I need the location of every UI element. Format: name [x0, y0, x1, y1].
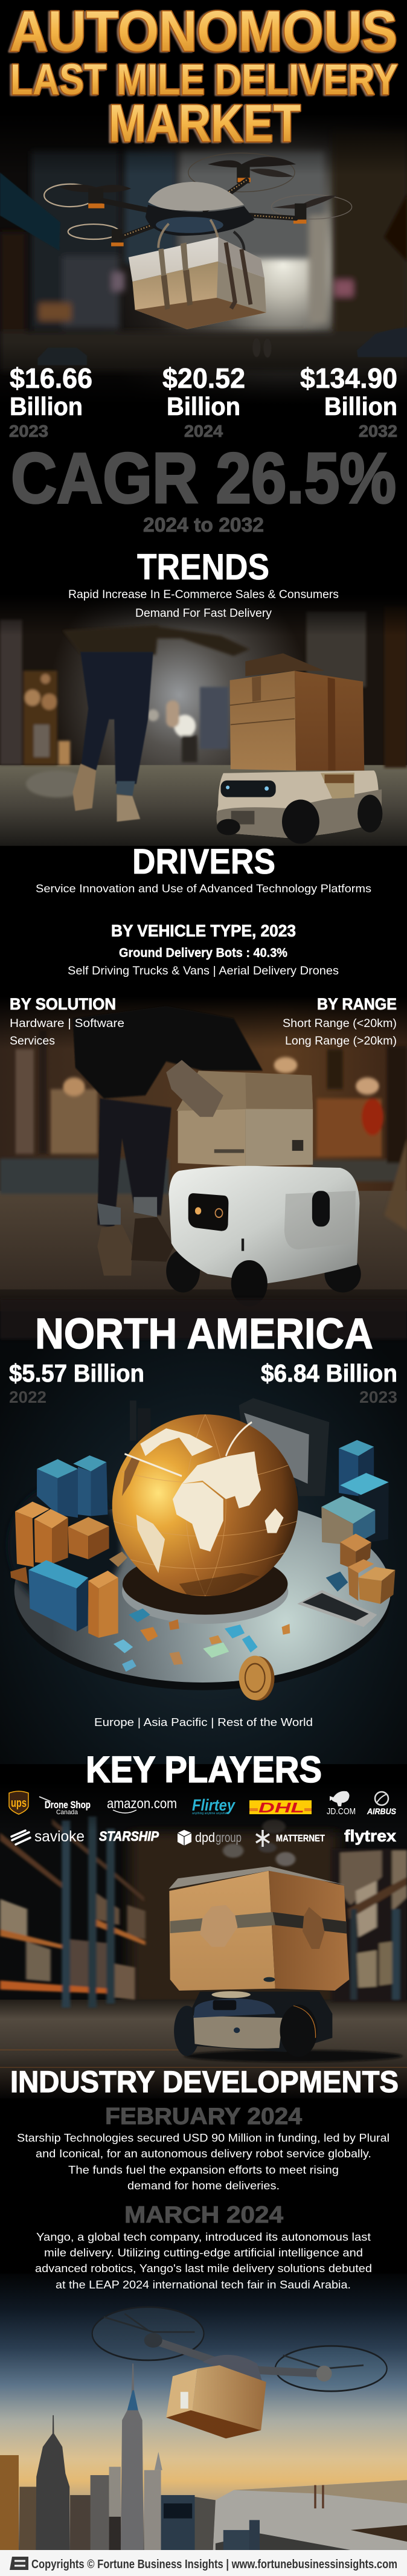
stat: 2024 market size: $20.52	[162, 362, 245, 394]
logos: key players row one	[9, 1791, 397, 1817]
panel: trends scene	[0, 601, 407, 846]
stat: 2023 market size: 2023	[9, 422, 48, 440]
stat: 2024 market size: Billion	[167, 392, 240, 420]
heading: drivers: DRIVERS	[132, 842, 275, 881]
stat: 2032 market size: 2032	[359, 422, 397, 440]
development: march 2024: MARCH 2024	[124, 2202, 283, 2228]
band: drivers black background	[0, 878, 407, 999]
text: trends description: Demand For Fast Delivery	[135, 607, 272, 620]
footer: copyright bar	[0, 2550, 407, 2576]
logo: dhl: DHL	[258, 1800, 304, 1815]
stat: 2024 market size: 2024	[184, 422, 223, 440]
panel: drivers scene	[0, 997, 407, 1330]
segment: by vehicle type	[68, 921, 339, 977]
development: march 2024	[35, 2202, 372, 2291]
icon: laptop	[297, 1590, 377, 1627]
stat: north america 2022: $5.57 Billion	[9, 1359, 144, 1387]
icon: stacked cardboard boxes	[230, 653, 364, 770]
logo: jd.com: JD.COM	[327, 1806, 356, 1817]
stat: 2023 market size: $16.66	[10, 362, 92, 394]
text: trends description: Rapid Increase In E-Commerce Sales & Consumers	[68, 588, 339, 601]
segment: by range	[283, 995, 397, 1048]
icon: delivery robot	[216, 770, 382, 844]
logo: dpd group	[178, 1830, 242, 1846]
panel: skyline drone scene	[0, 2274, 407, 2550]
segment: by solution: BY SOLUTION	[10, 995, 116, 1013]
development: march 2024: advanced robotics, Yango's last mile delivery solutions debuted	[35, 2262, 372, 2275]
logo: savioke	[11, 1828, 85, 1845]
stat: 2024 market size	[162, 362, 245, 440]
panel: warehouse robot scene	[0, 1815, 407, 2096]
icon: globe	[112, 1414, 298, 1596]
icon: large parcel	[169, 1866, 349, 1991]
icon: delivery drone	[44, 153, 352, 251]
logo: airbus: AIRBUS	[367, 1806, 397, 1816]
stat: 2023 market size: Billion	[10, 392, 83, 420]
development: march 2024: mile delivery. Utilizing cutting-edge artificial intelligence and	[44, 2247, 363, 2259]
icon: coin	[239, 1656, 275, 1701]
segment: by vehicle type: Self Driving Trucks & Vans | Aerial Delivery Drones	[68, 965, 339, 977]
stat: 2032 market size: Billion	[324, 392, 397, 420]
development: february 2024: demand for home deliveries.	[127, 2180, 280, 2192]
icon: blue and orange crates right	[321, 1440, 395, 1604]
band: developments text background	[0, 2100, 407, 2273]
icon: fortune business insights logo	[10, 2557, 28, 2570]
title: MARKET	[109, 94, 301, 153]
logo: airbus	[367, 1792, 397, 1816]
segment: by vehicle type: BY VEHICLE TYPE, 2023	[111, 921, 296, 940]
logo: savioke: savioke	[34, 1828, 85, 1845]
logo: flytrex: flytrex	[344, 1827, 396, 1845]
heading: north america: NORTH AMERICA	[35, 1310, 373, 1358]
development: february 2024: Starship Technologies secured USD 90 Million in funding, led by Plural	[17, 2132, 389, 2144]
development: february 2024: The funds fuel the expansion efforts to meet rising	[68, 2164, 339, 2176]
logo: ups	[9, 1791, 28, 1814]
stat: north america 2022: 2022	[9, 1388, 46, 1406]
logo: starship: STARSHIP	[99, 1829, 159, 1844]
logo: drone shop canada: Drone Shop	[45, 1799, 91, 1811]
stat: 2023 market size	[9, 362, 92, 440]
heading: key players: KEY PLAYERS	[86, 1749, 322, 1790]
text: other regions: Europe | Asia Pacific | Rest of the World	[94, 1716, 313, 1728]
icon: blue and orange crates left	[10, 1455, 118, 1638]
logo: dhl	[249, 1800, 312, 1815]
heading: trends: TRENDS	[137, 547, 269, 587]
development: february 2024: FEBRUARY 2024	[105, 2104, 302, 2130]
icon: round platform	[8, 1484, 391, 1690]
logo: ups: ups	[11, 1797, 27, 1810]
icon: river and far bank	[194, 2480, 407, 2550]
logo: dpd group: group	[216, 1830, 242, 1845]
development: february 2024	[17, 2104, 389, 2192]
logo: matternet: MATTERNET	[276, 1834, 325, 1844]
segment: by vehicle type: Ground Delivery Bots : 40.3%	[119, 946, 287, 960]
segment: by solution	[10, 995, 124, 1048]
icon: walking person	[62, 625, 249, 822]
icon: scattered small parcels	[109, 1551, 290, 1672]
segment: by range: Short Range (<20km)	[283, 1017, 397, 1030]
segment: by range: BY RANGE	[317, 995, 397, 1013]
logo: drone shop canada: Canada	[56, 1809, 79, 1816]
stat: north america 2023: $6.84 Billion	[261, 1359, 397, 1387]
development: march 2024: Yango, a global tech company, introduced its autonomous last	[36, 2231, 371, 2243]
icon: parcel under drone	[129, 237, 266, 329]
icon: street silhouettes	[37, 327, 407, 365]
logo: jd.com	[327, 1791, 356, 1817]
panel: north america region scene	[0, 1299, 407, 1764]
segment: by solution: Hardware | Software	[10, 1017, 124, 1030]
stat: north america 2022	[9, 1359, 144, 1406]
stat: 2032 market size: $134.90	[300, 362, 397, 394]
segment: by solution: Services	[10, 1035, 55, 1048]
icon: courier person	[72, 1006, 263, 1275]
icon: robot base	[174, 1991, 332, 2057]
logo: flirtey: Flirtey	[192, 1796, 236, 1814]
logo: flirtey: anything anytime anywhere	[192, 1812, 229, 1815]
development: february 2024: and Iconical, for an autonomous delivery robot service globally.	[36, 2148, 371, 2160]
title	[10, 0, 398, 153]
text: drivers description: Service Innovation and Use of Advanced Technology Platforms	[36, 883, 371, 895]
stat: 2032 market size	[300, 362, 397, 440]
icon: white delivery robot	[166, 1166, 361, 1306]
logo: dpd group: dpd	[195, 1830, 215, 1845]
logo: amazon: amazon.com	[107, 1795, 177, 1811]
stat: north america 2023: 2023	[359, 1388, 397, 1406]
stat: north america 2023	[261, 1359, 397, 1406]
logos: key players row two	[11, 1827, 396, 1847]
logo: drone shop canada	[39, 1797, 91, 1816]
icon: drone with parcel	[92, 2307, 387, 2438]
segment: by range: Long Range (>20km)	[285, 1035, 397, 1048]
development: march 2024: at the LEAP 2024 international tech fair in Saudi Arabia.	[56, 2279, 351, 2291]
CAGR period: 2024 to 2032	[143, 514, 264, 536]
panel: hero drone scene	[0, 126, 407, 393]
icon: cardboard box with hand	[166, 1060, 313, 1166]
logo: matternet	[256, 1830, 325, 1847]
icon: monitor	[130, 1398, 329, 1496]
text: trends description	[68, 588, 339, 620]
icon: skyline buildings	[0, 2363, 260, 2550]
